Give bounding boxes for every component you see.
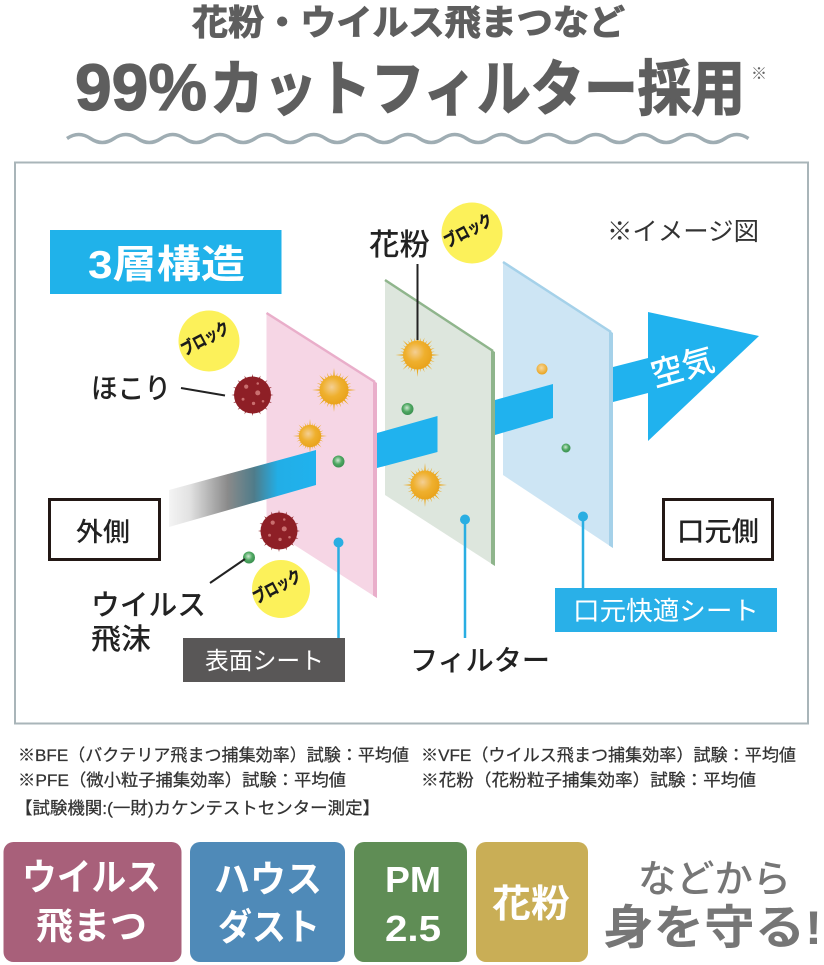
arrow: air exit (613, 312, 759, 441)
badge: block (pollen): ブロック (440, 209, 496, 252)
callout: surface sheet: 表面シート (205, 648, 324, 675)
particles: virus droplets (243, 364, 570, 564)
particles: pollen (293, 333, 447, 507)
tile: house dust: ハウス (214, 859, 322, 900)
arrow label: air: 空気 (647, 341, 718, 394)
closing statement: 身を守る! (603, 901, 822, 954)
title: reference mark: ※ (751, 66, 767, 83)
panel: 3-layer diagram (15, 162, 808, 724)
label: virus droplets: 飛沫 (91, 623, 151, 656)
closing statement (603, 859, 822, 954)
closing statement: などから (638, 859, 791, 901)
tile: house dust: ダスト (218, 907, 320, 948)
callout: mouth comfort sheet (555, 512, 777, 632)
sheet: surface (pink) (266, 313, 377, 598)
badge: block (virus): ブロック (249, 565, 305, 608)
particles: dust (231, 374, 300, 552)
sheet: mouth comfort (blue) (503, 262, 613, 548)
air flow band: third segment (495, 384, 553, 435)
callout: surface sheet (183, 538, 345, 682)
tile: PM2.5: 2.5 (385, 908, 441, 949)
panel frame (15, 162, 808, 724)
title: main headline: 99% (75, 50, 207, 124)
tile: house dust (190, 842, 345, 962)
label box: outside: 外側 (76, 517, 130, 547)
footnotes (15, 746, 796, 818)
title: main headline (75, 50, 745, 124)
wavy divider (67, 134, 748, 142)
title: first line: 花粉・ウイルス飛まつなど (192, 4, 625, 43)
label: pollen: 花粉 (369, 229, 430, 262)
heading: 3-layer structure (50, 230, 282, 294)
footnote: VFE: ※VFE（ウイルス飛まつ捕集効率）試験：平均値 (421, 746, 796, 765)
footnote: pollen: ※花粉（花粉粒子捕集効率）試験：平均値 (421, 771, 756, 790)
tile: pollen (476, 842, 588, 962)
label box: outside (50, 500, 160, 560)
note: image illustration: ※イメージ図 (607, 218, 759, 246)
air flow band: second segment (377, 416, 438, 468)
label: virus droplets (91, 559, 245, 656)
tile: virus droplets: ウイルス (22, 857, 161, 898)
footnote: test institution: 【試験機関:(一財)カケンテストセンター測定】 (15, 799, 380, 818)
footnote: BFE: ※BFE（バクテリア飛まつ捕集効率）試験：平均値 (18, 746, 409, 765)
badge: block (dust): ブロック (177, 317, 233, 360)
air flow band: outside gradient (169, 450, 316, 527)
title: main headline: カットフィルター採用 (210, 56, 745, 123)
tile: PM2.5: PM (385, 859, 441, 900)
label: pollen (369, 229, 430, 340)
tile: PM2.5 (354, 842, 467, 962)
footnote: PFE: ※PFE（微小粒子捕集効率）試験：平均値 (18, 771, 346, 790)
sheet: filter (green) (385, 280, 495, 566)
tile: virus droplets: 飛まつ (36, 906, 147, 947)
heading: 3-layer structure: 3層構造 (88, 244, 245, 287)
label box: mouth side (664, 500, 772, 560)
callout: mouth comfort sheet: 口元快適シート (573, 596, 759, 626)
callout: filter: フィルター (410, 645, 550, 676)
label: dust: ほこり (91, 373, 171, 404)
callout: filter (410, 514, 550, 676)
tile: pollen: 花粉 (492, 884, 570, 926)
label box: mouth side: 口元側 (677, 517, 759, 547)
label: virus droplets: ウイルス (91, 590, 206, 622)
label: dust (91, 373, 225, 404)
tile: virus droplets (4, 842, 182, 962)
